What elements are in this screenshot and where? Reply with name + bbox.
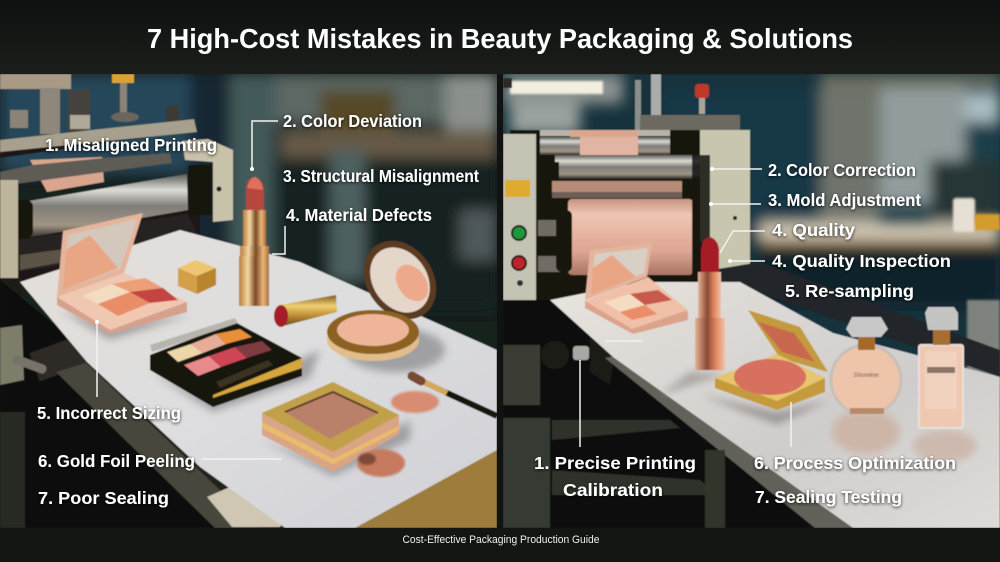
- mistakes labels: 5. Incorrect Sizing: [37, 403, 181, 423]
- rectangular perfume bottle: [919, 307, 963, 428]
- solutions labels: 6. Process Optimization: [754, 453, 956, 473]
- white work table: [20, 230, 497, 528]
- solutions labels: 3. Mold Adjustment: [768, 190, 921, 210]
- solutions labels: 7. Sealing Testing: [755, 487, 902, 507]
- mistakes labels: 7. Poor Sealing: [38, 488, 169, 508]
- foil-peeling compact: [262, 382, 399, 472]
- right leader lines: [580, 167, 791, 447]
- printing machine: [0, 74, 233, 308]
- round perfume bottle: [831, 317, 901, 415]
- rose palette with mirror: [57, 213, 187, 334]
- solutions labels: 1. Precise Printing: [534, 453, 696, 473]
- footer band: [0, 528, 1000, 562]
- round perfume bottle: Shoreline: [853, 373, 879, 379]
- header band: [0, 0, 1000, 74]
- solutions labels: 2. Color Correction: [768, 160, 916, 180]
- table edge and lower machine: [0, 280, 282, 528]
- back rail of table: [700, 262, 1000, 377]
- lower machine frame: [503, 300, 853, 528]
- white work table: [550, 282, 1000, 528]
- mistakes labels: 4. Material Defects: [286, 205, 432, 225]
- object shadows on table: [60, 310, 445, 476]
- panel: mistakes photo scene: [0, 74, 497, 528]
- mistakes labels: [37, 111, 479, 508]
- solutions labels: Calibration: [563, 480, 663, 500]
- mistakes labels: 3. Structural Misalignment: [283, 166, 479, 186]
- solutions labels: [534, 160, 956, 507]
- solutions labels: 4. Quality: [772, 220, 855, 240]
- rose palette with mirror: [585, 243, 688, 334]
- gold blush compact: [715, 310, 828, 410]
- solutions labels: 4. Quality Inspection: [772, 251, 951, 271]
- mistakes labels: 6. Gold Foil Peeling: [38, 451, 195, 471]
- blurred factory background: [503, 74, 1000, 385]
- blurred factory background: [0, 74, 497, 350]
- lipstick with colour deviation: [239, 177, 269, 306]
- panel: solutions photo scene: [503, 74, 1000, 528]
- object shadows and reflections: [660, 372, 977, 462]
- title: 7 High-Cost Mistakes in Beauty Packaging & Solutions: [147, 23, 853, 54]
- dark eyeshadow palette: [150, 318, 302, 407]
- left leader lines: [95, 121, 285, 459]
- wood floor corner: [353, 448, 497, 528]
- mistakes labels: 2. Color Deviation: [283, 111, 422, 131]
- round gold compact: [326, 240, 437, 362]
- solutions labels: 5. Re-sampling: [785, 281, 914, 301]
- footer caption: Cost-Effective Packaging Production Guide: [402, 534, 600, 546]
- lying lipstick: [274, 295, 337, 327]
- spilled powder: [357, 391, 439, 477]
- printing machine with rollers: [503, 74, 751, 315]
- mistakes labels: 1. Misaligned Printing: [45, 135, 217, 155]
- red lipstick: [695, 237, 725, 370]
- gold cube: [178, 260, 216, 294]
- makeup brush: [412, 376, 497, 416]
